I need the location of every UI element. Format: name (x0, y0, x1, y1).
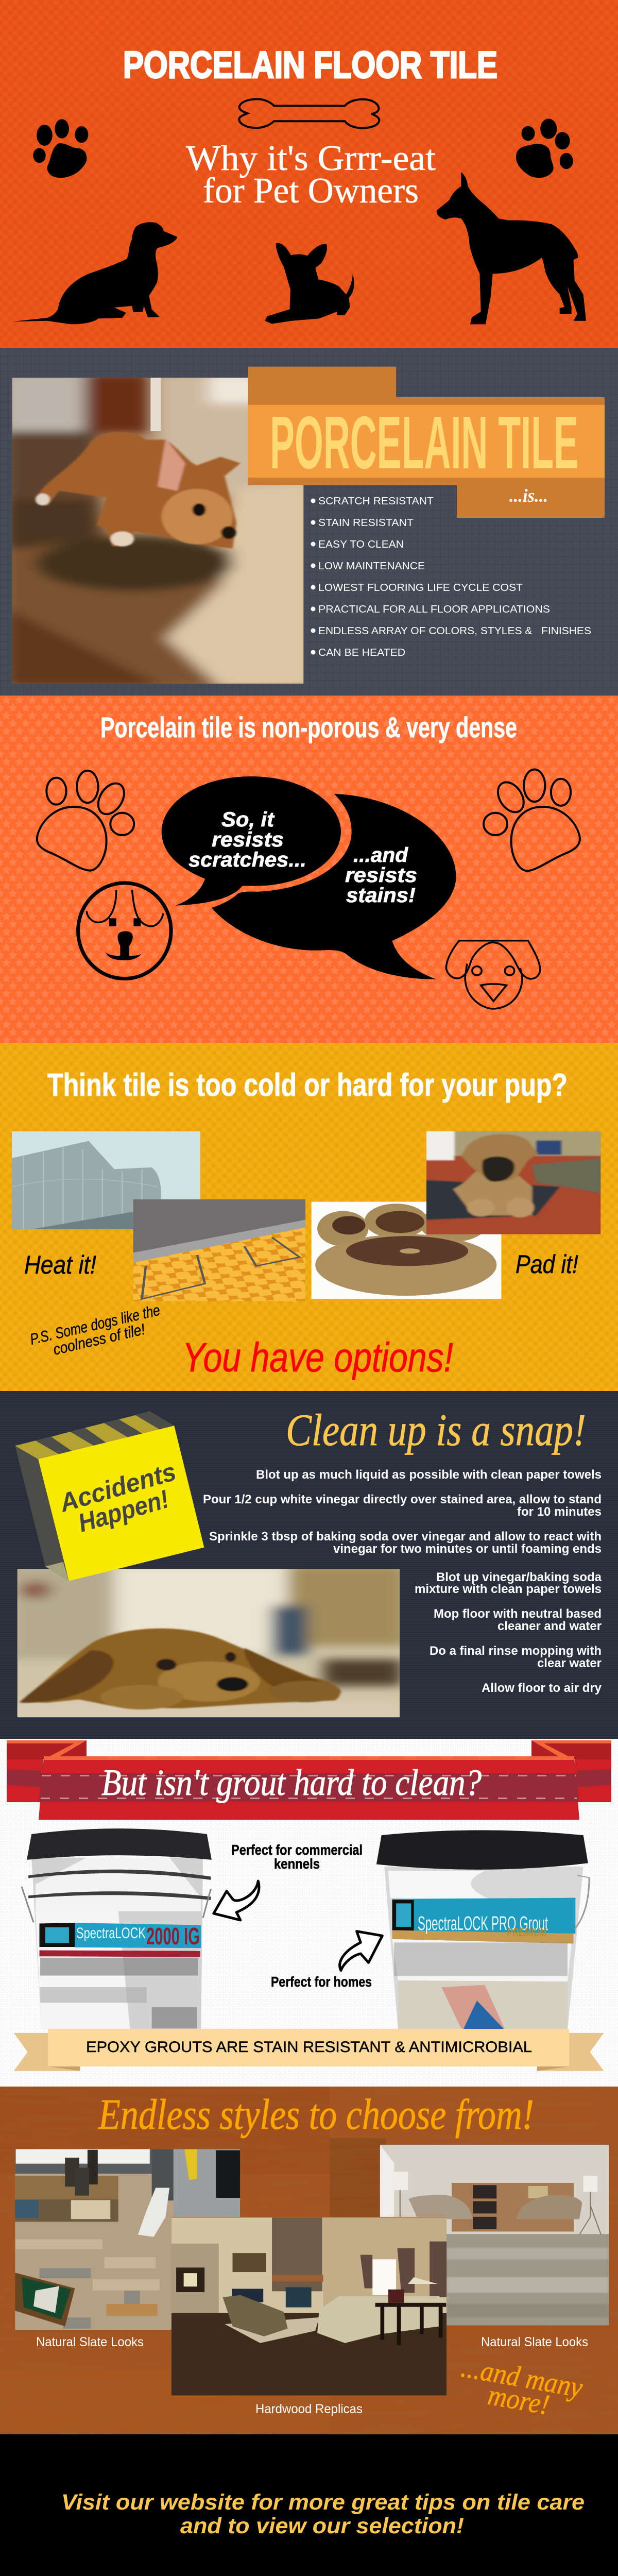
captions: Natural Slate Looks (36, 2335, 144, 2349)
captions (36, 2335, 588, 2416)
photo: hardwood replica living room (171, 2217, 447, 2396)
title: PORCELAIN FLOOR TILE (123, 44, 497, 86)
benefits list: ENDLESS ARRAY OF COLORS, STYLES & FINISHES (318, 625, 591, 637)
speech bubble: resists scratches (162, 776, 341, 906)
benefits list: CAN BE HEATED (318, 647, 405, 658)
subtitle (186, 139, 436, 211)
captions: Hardwood Replicas (255, 2402, 363, 2416)
icon: dog face right (446, 941, 540, 1009)
ribbon: porcelain tile banner (248, 367, 605, 518)
label: heat it: Heat it! (24, 1250, 96, 1279)
banner: epoxy grouts: EPOXY GROUTS ARE STAIN RESISTANT & ANTIMICROBIAL (86, 2039, 532, 2056)
icon: outlined paw right (484, 770, 580, 871)
photo: sad spaniel on floor (8, 1565, 406, 1722)
arrow: to commercial grout (214, 1881, 259, 1920)
cleaning steps: vinegar for two minutes or until foaming ends (333, 1542, 602, 1556)
panel: clean up (0, 1391, 618, 1739)
cleaning steps: Pour 1/2 cup white vinegar directly over stained area, allow to stand (203, 1493, 602, 1506)
icon: small dog silhouette (265, 243, 354, 324)
note: some dogs like the coolness: coolness of tile! (52, 1321, 147, 1359)
benefits list: EASY TO CLEAN (318, 539, 404, 550)
sign: accidents happen: Accidents (56, 1457, 179, 1518)
sign: accidents happen: Happen! (75, 1484, 172, 1538)
label: perfect for commercial kennels: Perfect for commercial (231, 1842, 363, 1858)
captions: Natural Slate Looks (481, 2335, 588, 2349)
cleaning steps: Blot up vinegar/baking soda (436, 1570, 602, 1584)
benefits list: PRACTICAL FOR ALL FLOOR APPLICATIONS (318, 604, 550, 615)
heading: endless styles: Endless styles to choose from! (98, 2091, 534, 2139)
speech bubble: resists stains: ...and (353, 844, 409, 867)
cleaning steps: mixture with clean paper towels (415, 1582, 602, 1596)
bucket: SpectraLOCK PRO Grout (376, 1830, 589, 2029)
cleaning steps: clear water (537, 1656, 602, 1670)
cleaning steps (203, 1468, 602, 1695)
callout: you have options: You have options! (182, 1334, 453, 1380)
speech bubble: resists scratches: scratches... (188, 849, 306, 871)
panel: grout (1, 1739, 618, 2086)
bucket: SpectraLOCK 2000 IG: SpectraLOCK (76, 1925, 146, 1942)
note: some dogs like the coolness (28, 1302, 162, 1359)
panel: endless styles (0, 2087, 618, 2434)
benefits list (311, 496, 591, 658)
icon: left paw print (33, 119, 88, 178)
icon: right paw print (516, 118, 573, 178)
panel: header (0, 0, 618, 348)
panel: non-porous and dense (0, 696, 618, 1043)
label: pad it: Pad it! (516, 1250, 578, 1279)
speech bubble: resists stains (212, 794, 456, 979)
sign: accidents happen (15, 1411, 204, 1581)
speech bubble: resists stains: resists (345, 864, 417, 887)
speech bubble: resists scratches: resists (212, 828, 284, 851)
photo: radiant heat system (133, 1199, 305, 1301)
bucket: SpectraLOCK PRO Grout: PREMIUM (507, 1926, 546, 1939)
cleaning steps: for 10 minutes (517, 1505, 602, 1519)
subtitle: for Pet Owners (203, 171, 419, 211)
cleaning steps: Allow floor to air dry (482, 1681, 602, 1695)
callout: and many more: more! (486, 2379, 552, 2421)
photo: puppy on rug (424, 1129, 603, 1234)
cleaning steps: Mop floor with neutral based (434, 1607, 602, 1621)
panel: porcelain tile is (0, 348, 618, 696)
photo: paw-shaped dog bed (312, 1202, 501, 1299)
icon: outlined paw left (37, 771, 134, 871)
text: visit our website: Visit our website for more great tips on tile care (61, 2490, 585, 2515)
photo: small dog on tile floor (4, 374, 315, 687)
ribbon: heading banner (7, 1740, 611, 1820)
benefits list: SCRATCH RESISTANT (318, 496, 434, 507)
panel: website call to action (0, 2434, 618, 2576)
cleaning steps: Do a final rinse mopping with (430, 1644, 602, 1658)
arrow: to home grout (340, 1931, 382, 1971)
subtitle: Why it's Grrr-eat (186, 139, 436, 178)
icon: large dog silhouette (437, 172, 586, 324)
bucket: SpectraLOCK 2000 IG (22, 1828, 212, 2029)
label: perfect for commercial kennels (231, 1842, 363, 1872)
note: some dogs like the coolness: P.S. Some dogs like the (28, 1302, 162, 1348)
benefits list: LOW MAINTENANCE (318, 561, 425, 572)
icon: dog face left (78, 883, 171, 978)
panel: too cold or hard (0, 1043, 618, 1391)
bucket: SpectraLOCK 2000 IG: 2000 IG (146, 1923, 200, 1950)
photo: natural slate room (15, 2149, 240, 2330)
speech bubble: resists stains: stains! (346, 884, 416, 907)
cleaning steps: Sprinkle 3 tbsp of baking soda over vinegar and allow to react with (209, 1530, 602, 1544)
icon: sitting dog silhouette (12, 222, 177, 324)
benefits list: LOWEST FLOORING LIFE CYCLE COST (318, 582, 523, 594)
icon: dog bone (239, 99, 379, 128)
photo: heating mat (12, 1131, 200, 1229)
label: perfect for homes: Perfect for homes (271, 1974, 372, 1990)
label: is: ...is... (509, 485, 548, 506)
photo: modern grey tile room (380, 2145, 609, 2326)
cleaning steps: cleaner and water (497, 1619, 602, 1633)
speech bubble: resists scratches: So, it (221, 808, 275, 831)
heading: but isn't grout hard to clean: But isn't grout hard to clean? (101, 1762, 482, 1803)
benefits list: STAIN RESISTANT (318, 517, 414, 529)
label: perfect for commercial kennels: kennels (274, 1856, 320, 1872)
callout: and many more: ...and many (459, 2351, 585, 2404)
text: visit our website (61, 2490, 585, 2538)
cleaning steps: Blot up as much liquid as possible with clean paper towels (256, 1468, 602, 1482)
text: visit our website: and to view our selection! (180, 2514, 464, 2538)
banner: epoxy grouts (14, 2029, 604, 2071)
